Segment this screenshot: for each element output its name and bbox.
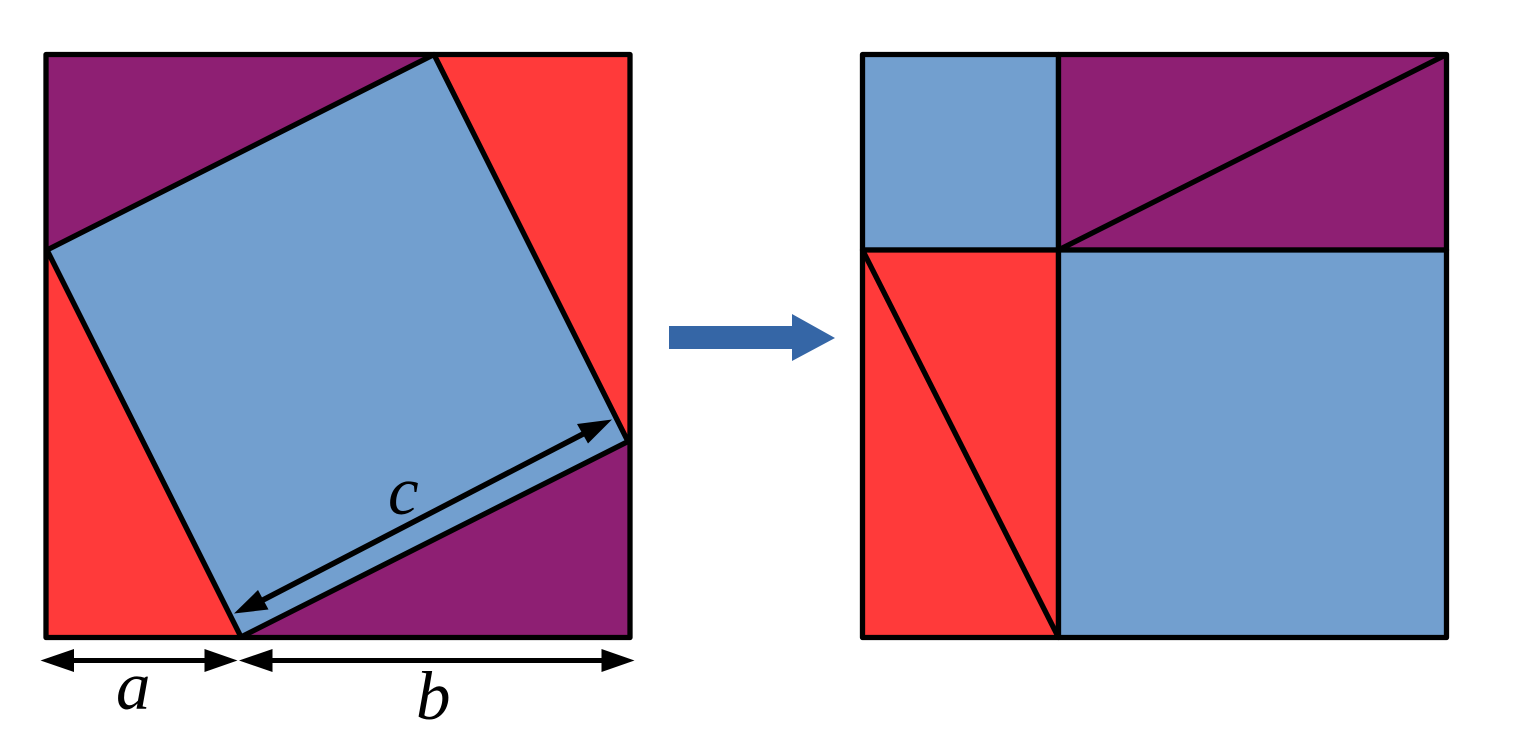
panel: right rearranged square (862, 54, 1446, 638)
purple triangle top left (46, 54, 434, 250)
label: b: b (416, 658, 450, 734)
outer square outline (46, 54, 630, 638)
arrow: length c (234, 420, 612, 614)
arrow: length b (239, 649, 634, 672)
tilted blue square (47, 54, 628, 637)
purple rectangle with diagonal (1058, 54, 1446, 250)
purple triangle bottom right (241, 442, 630, 638)
small blue square a (862, 54, 1058, 250)
red triangle bottom left (46, 250, 241, 638)
arrow: transformation (669, 314, 835, 361)
label: c: c (388, 453, 419, 529)
arrow: length a (40, 649, 238, 672)
red rectangle with diagonal (862, 250, 1058, 638)
panel: left square with tilted c square (46, 54, 630, 638)
label: a: a (116, 648, 150, 724)
large blue square b (1058, 250, 1446, 638)
red triangle top right (434, 54, 630, 442)
